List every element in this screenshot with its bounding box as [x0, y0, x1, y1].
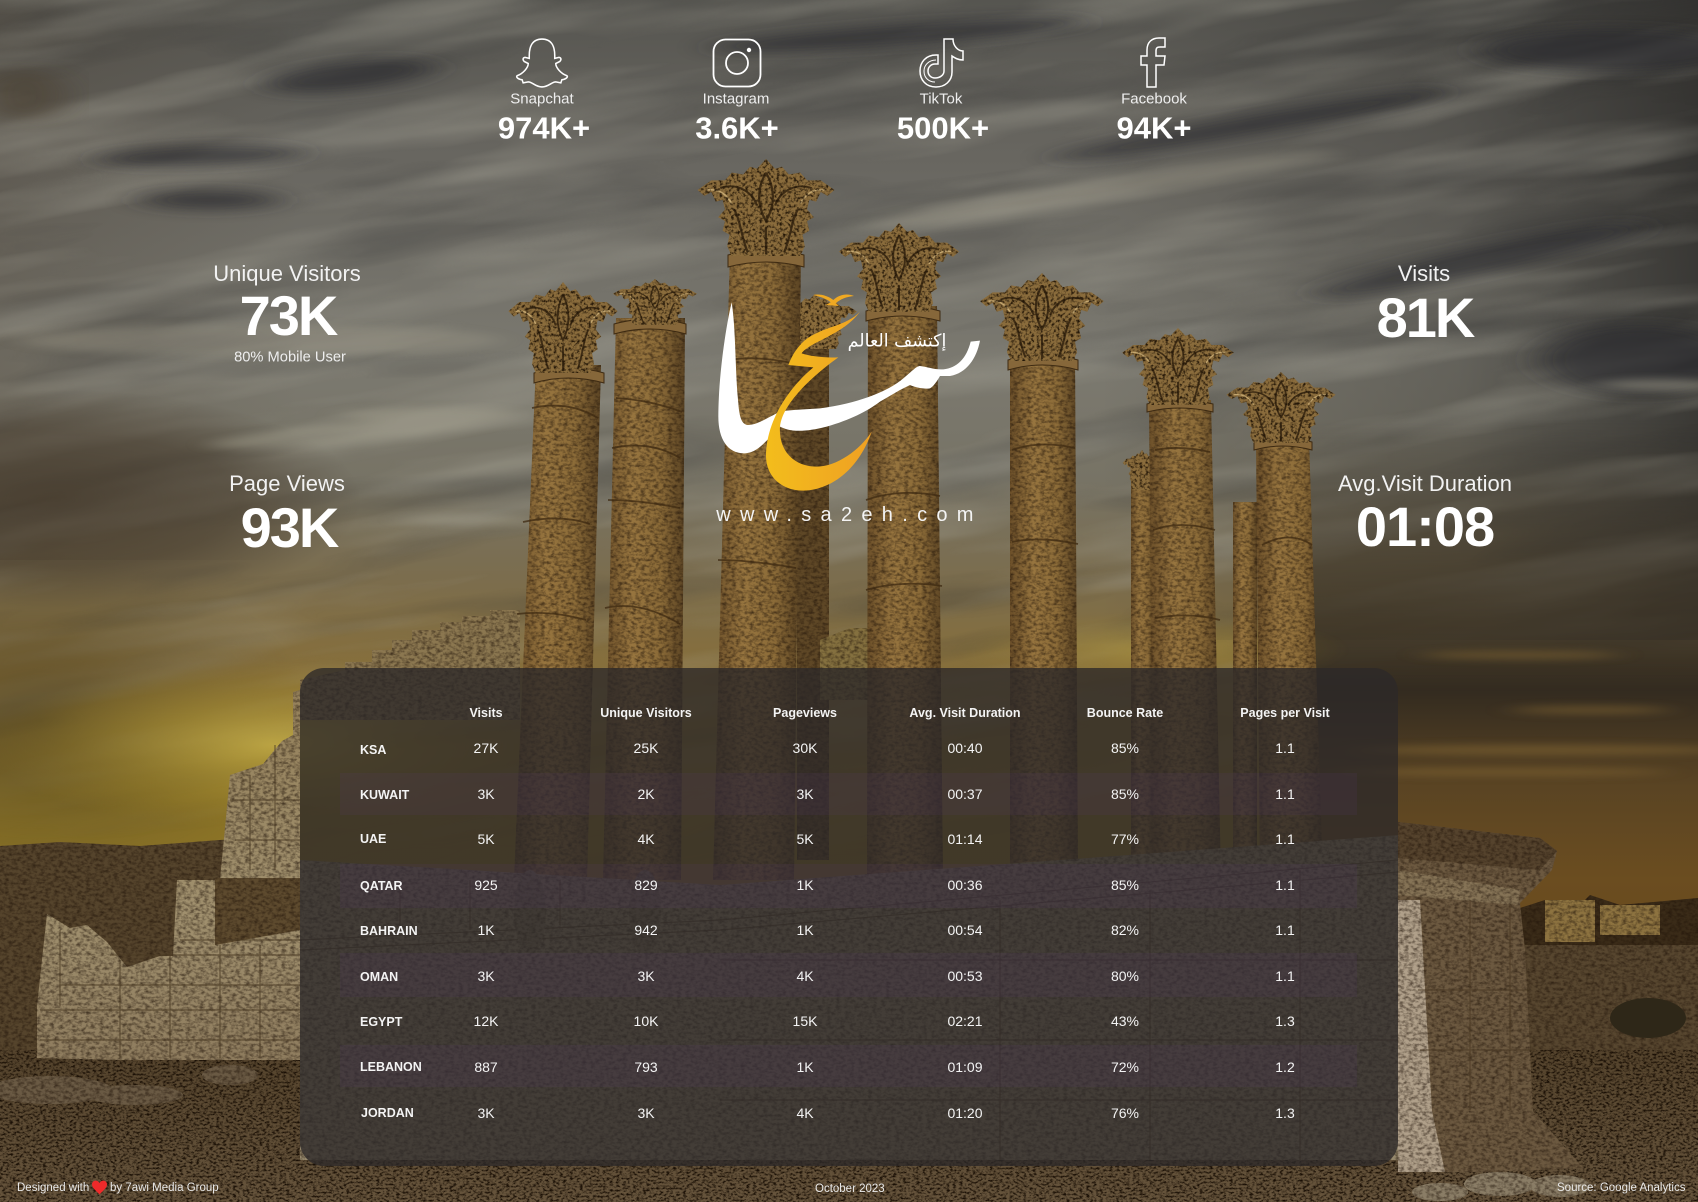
row: Oman: OMAN — [360, 970, 398, 984]
label: Facebook: Facebook — [1121, 90, 1187, 108]
stat label: Page Views: Page Views — [229, 471, 345, 496]
row: Kuwait: 85% — [1111, 786, 1139, 802]
table header — [469, 706, 1330, 720]
row: Jordan: 1.3 — [1275, 1105, 1295, 1121]
row: Jordan — [361, 1105, 1295, 1121]
row: Bahrain: 82% — [1111, 922, 1139, 938]
row stripe: Kuwait — [340, 773, 1357, 815]
row: Jordan: 76% — [1111, 1105, 1139, 1121]
row: Oman: 3K — [637, 968, 655, 984]
table header: Pages per Visit — [1240, 706, 1330, 720]
row: Egypt: 43% — [1111, 1013, 1139, 1029]
row: Oman: 80% — [1111, 968, 1139, 984]
row: Bahrain: 942 — [634, 922, 658, 938]
row: UAE: 1.1 — [1275, 831, 1295, 847]
row: Qatar: 925 — [474, 877, 498, 893]
row: Bahrain: 1.1 — [1275, 922, 1295, 938]
row: Kuwait: 2K — [637, 786, 655, 802]
rear small columns — [797, 330, 1257, 862]
footer: credit continued: by 7awi Media Group — [110, 1182, 219, 1194]
logo tagline: إكتشف العالم — [848, 331, 946, 351]
row stripe: Oman — [340, 953, 1357, 997]
icon: TikTok — [919, 38, 964, 88]
capitals — [508, 159, 1336, 443]
row: Lebanon: 72% — [1111, 1059, 1139, 1075]
stat value: Page Views: 93K — [241, 496, 337, 559]
row: Kuwait: 3K — [796, 786, 814, 802]
row: KSA: KSA — [360, 743, 386, 757]
row: UAE — [360, 831, 1295, 847]
icon: heart — [92, 1180, 107, 1194]
row: Jordan: 3K — [477, 1105, 495, 1121]
row: Lebanon — [360, 1059, 1295, 1075]
row: Qatar — [360, 877, 1295, 893]
stat label: Visits: Visits — [1398, 261, 1450, 286]
footer: date: October 2023 — [815, 1183, 885, 1195]
number: TikTok followers: 500K+ — [897, 110, 989, 146]
stat label: Avg. Visit Duration: Avg.Visit Duration — [1338, 471, 1512, 496]
stat value: Visits: 81K — [1377, 286, 1473, 349]
table header: Visits — [469, 706, 503, 720]
number: Facebook followers: 94K+ — [1117, 110, 1191, 146]
row: Bahrain: 1K — [477, 922, 495, 938]
row: Egypt: 10K — [634, 1013, 658, 1029]
table header: Unique Visitors — [600, 706, 692, 720]
row: UAE: 01:14 — [947, 831, 983, 847]
footer: source: Source: Google Analytics — [1557, 1182, 1686, 1194]
row: Qatar: 00:36 — [947, 877, 983, 893]
columns — [514, 250, 1323, 880]
row: Oman: 3K — [477, 968, 495, 984]
row: Jordan: 4K — [796, 1105, 814, 1121]
row: Bahrain: 00:54 — [947, 922, 983, 938]
row: UAE: 77% — [1111, 831, 1139, 847]
row: Lebanon: 793 — [634, 1059, 658, 1075]
number: Snapchat followers: 974K+ — [498, 110, 590, 146]
icon: Snapchat — [516, 38, 568, 88]
label: Instagram: Instagram — [703, 90, 769, 108]
row: KSA: 85% — [1111, 740, 1139, 756]
stat label: Unique Visitors: Unique Visitors — [213, 261, 361, 286]
row: Lebanon: 887 — [474, 1059, 498, 1075]
row: Egypt — [360, 1013, 1295, 1029]
row: Qatar: 829 — [634, 877, 658, 893]
row: UAE: UAE — [360, 832, 386, 846]
row: Bahrain — [360, 922, 1295, 938]
row: Bahrain: 1K — [796, 922, 814, 938]
row: Oman: 00:53 — [947, 968, 983, 984]
icon: Instagram — [712, 38, 762, 88]
footer: credit: Designed with — [17, 1182, 89, 1194]
row: KSA: 25K — [634, 740, 658, 756]
row: Qatar: 1K — [796, 877, 814, 893]
row: Egypt: EGYPT — [360, 1015, 402, 1029]
row: Egypt: 15K — [793, 1013, 817, 1029]
row: Qatar: 1.1 — [1275, 877, 1295, 893]
row stripe: Lebanon — [340, 1045, 1357, 1087]
ground — [0, 1050, 1698, 1202]
row: Jordan: 01:20 — [947, 1105, 983, 1121]
row: KSA: 27K — [474, 740, 498, 756]
row: Jordan: JORDAN — [361, 1106, 414, 1120]
row: Lebanon: 01:09 — [947, 1059, 983, 1075]
website address: www.sa2eh.com — [716, 504, 983, 526]
row: Kuwait — [360, 786, 1295, 802]
row: Kuwait: KUWAIT — [360, 788, 409, 802]
row: Egypt: 12K — [474, 1013, 498, 1029]
table header: Avg. Visit Duration — [909, 706, 1021, 720]
row: Kuwait: 00:37 — [947, 786, 983, 802]
logo: Sa2eh calligraphy — [718, 294, 980, 491]
row: Kuwait: 1.1 — [1275, 786, 1295, 802]
row: Oman: 4K — [796, 968, 814, 984]
row: KSA — [360, 740, 1295, 757]
stat value: Unique Visitors: 73K — [240, 284, 336, 347]
row: Oman: 1.1 — [1275, 968, 1295, 984]
row: Lebanon: 1K — [796, 1059, 814, 1075]
distant hill and buildings — [0, 834, 1698, 1202]
row: KSA: 00:40 — [947, 740, 983, 756]
row stripe: Qatar — [340, 864, 1357, 908]
number: Instagram followers: 3.6K+ — [695, 110, 779, 146]
row: UAE: 4K — [637, 831, 655, 847]
stat value: Avg. Visit Duration: 01:08 — [1356, 495, 1494, 558]
label: TikTok: TikTok — [920, 90, 962, 108]
row: Kuwait: 3K — [477, 786, 495, 802]
row: UAE: 5K — [477, 831, 495, 847]
row: KSA: 30K — [793, 740, 817, 756]
row: Jordan: 3K — [637, 1105, 655, 1121]
table header: Pageviews — [773, 706, 837, 720]
row: Lebanon: 1.2 — [1275, 1059, 1295, 1075]
row: Oman — [360, 968, 1295, 984]
panel: country statistics table — [300, 668, 1398, 1166]
row: Qatar: QATAR — [360, 879, 403, 893]
row: Qatar: 85% — [1111, 877, 1139, 893]
fallen blocks — [514, 870, 661, 954]
label: Snapchat: Snapchat — [510, 90, 574, 108]
low walls behind columns — [300, 610, 870, 720]
left brown cloud band — [0, 390, 360, 610]
icon: Facebook — [1140, 37, 1166, 88]
stat note: mobile users: 80% Mobile User — [234, 350, 346, 366]
row: Egypt: 02:21 — [947, 1013, 983, 1029]
bright wisps — [20, 141, 1698, 524]
row: Egypt: 1.3 — [1275, 1013, 1295, 1029]
row: UAE: 5K — [796, 831, 814, 847]
row: Bahrain: BAHRAIN — [360, 924, 418, 938]
temple platform and ruined walls — [300, 822, 1583, 1172]
row: KSA: 1.1 — [1275, 740, 1295, 756]
table header: Bounce Rate — [1087, 706, 1163, 720]
row: Lebanon: LEBANON — [360, 1060, 422, 1074]
